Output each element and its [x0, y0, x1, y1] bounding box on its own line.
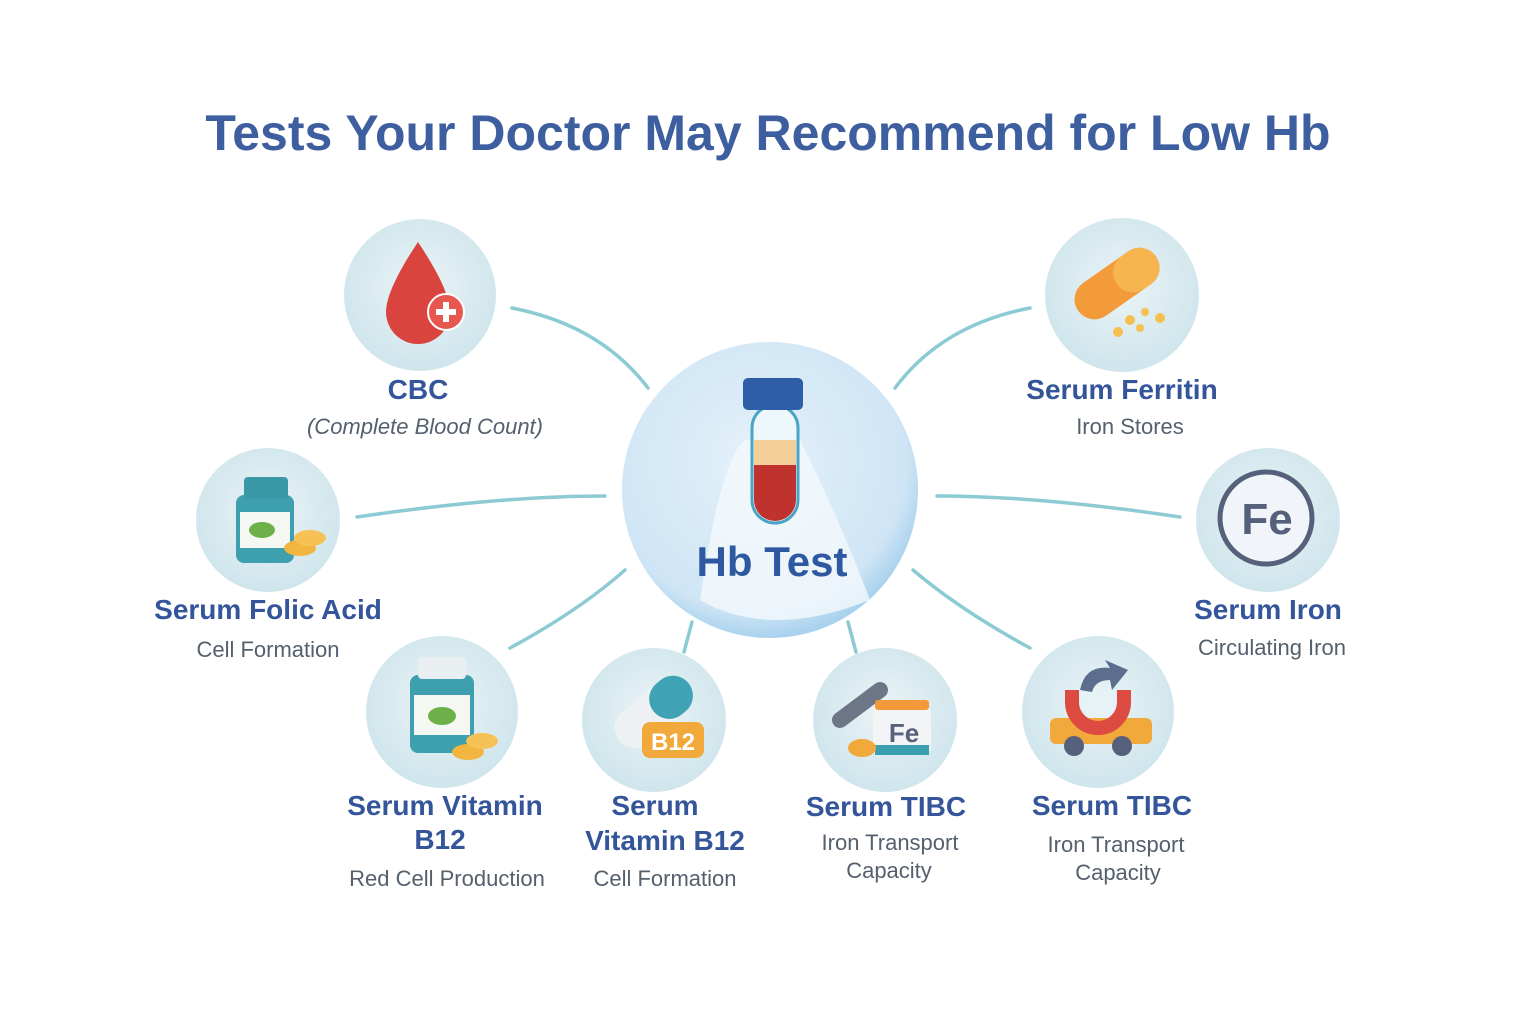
node: Serum Vitamin B12 (left): Red Cell Production	[349, 866, 545, 891]
connector lines	[357, 308, 1180, 652]
node: CBC	[307, 219, 543, 439]
node: Serum Folic Acid	[154, 448, 382, 662]
icon: Fe jar with wrench	[840, 690, 931, 757]
center hub: Hb Test: Hb Test	[697, 538, 847, 585]
node: Serum TIBC (2)	[1022, 636, 1192, 885]
node: Serum Vitamin B12 (left): Serum Vitamin	[347, 790, 543, 821]
node: Serum Vitamin B12 (left): B12	[414, 824, 466, 855]
node: Serum Vitamin B12 (middle): Cell Formation	[593, 866, 737, 891]
node: Serum Iron: Circulating Iron	[1198, 635, 1346, 660]
node: Serum Ferritin: Serum Ferritin	[1026, 374, 1218, 405]
icon: blood drop	[386, 242, 464, 344]
node: Serum Vitamin B12 (middle): B12	[651, 729, 695, 756]
node: Serum Ferritin: Iron Stores	[1076, 414, 1184, 439]
icon: test tube	[743, 378, 803, 523]
node: Serum TIBC (1): Iron Transport	[822, 830, 958, 855]
node: Serum TIBC (1): Serum TIBC	[806, 791, 966, 822]
node: Serum Ferritin	[1026, 218, 1218, 439]
node: CBC: (Complete Blood Count)	[307, 414, 543, 439]
node: Serum Iron	[1194, 448, 1346, 660]
node: Serum Iron: Serum Iron	[1194, 594, 1342, 625]
title: Tests Your Doctor May Recommend for Low Hb	[205, 105, 1331, 161]
icon: vitamin bottle	[410, 657, 498, 760]
node: Serum Vitamin B12 (middle)	[582, 648, 745, 891]
node: Serum TIBC (2): Capacity	[1075, 860, 1161, 885]
node: Serum Vitamin B12 (middle): Vitamin B12	[585, 825, 745, 856]
node: Serum TIBC (2): Serum TIBC	[1032, 790, 1192, 821]
node: Serum TIBC (2): Iron Transport	[1048, 832, 1184, 857]
node: Serum Vitamin B12 (left)	[347, 636, 545, 891]
icon: magnet truck	[1050, 660, 1152, 756]
node: Serum Vitamin B12 (middle): Serum	[611, 790, 699, 821]
icon: capsule	[1067, 240, 1167, 327]
node: Serum Folic Acid: Serum Folic Acid	[154, 594, 382, 625]
node: Serum TIBC (1)	[806, 648, 966, 883]
node: CBC: CBC	[388, 374, 448, 405]
node: Serum Folic Acid: Cell Formation	[196, 637, 340, 662]
icon: capsule B12	[607, 668, 701, 756]
icon: Fe coin: Fe	[1241, 495, 1293, 544]
node: Serum TIBC (1): Capacity	[846, 858, 932, 883]
icon: vitamin bottle	[236, 477, 326, 563]
icon: Fe jar with wrench: Fe	[889, 718, 919, 748]
icon: Fe coin	[1220, 472, 1312, 564]
center hub: Hb Test	[622, 342, 918, 638]
